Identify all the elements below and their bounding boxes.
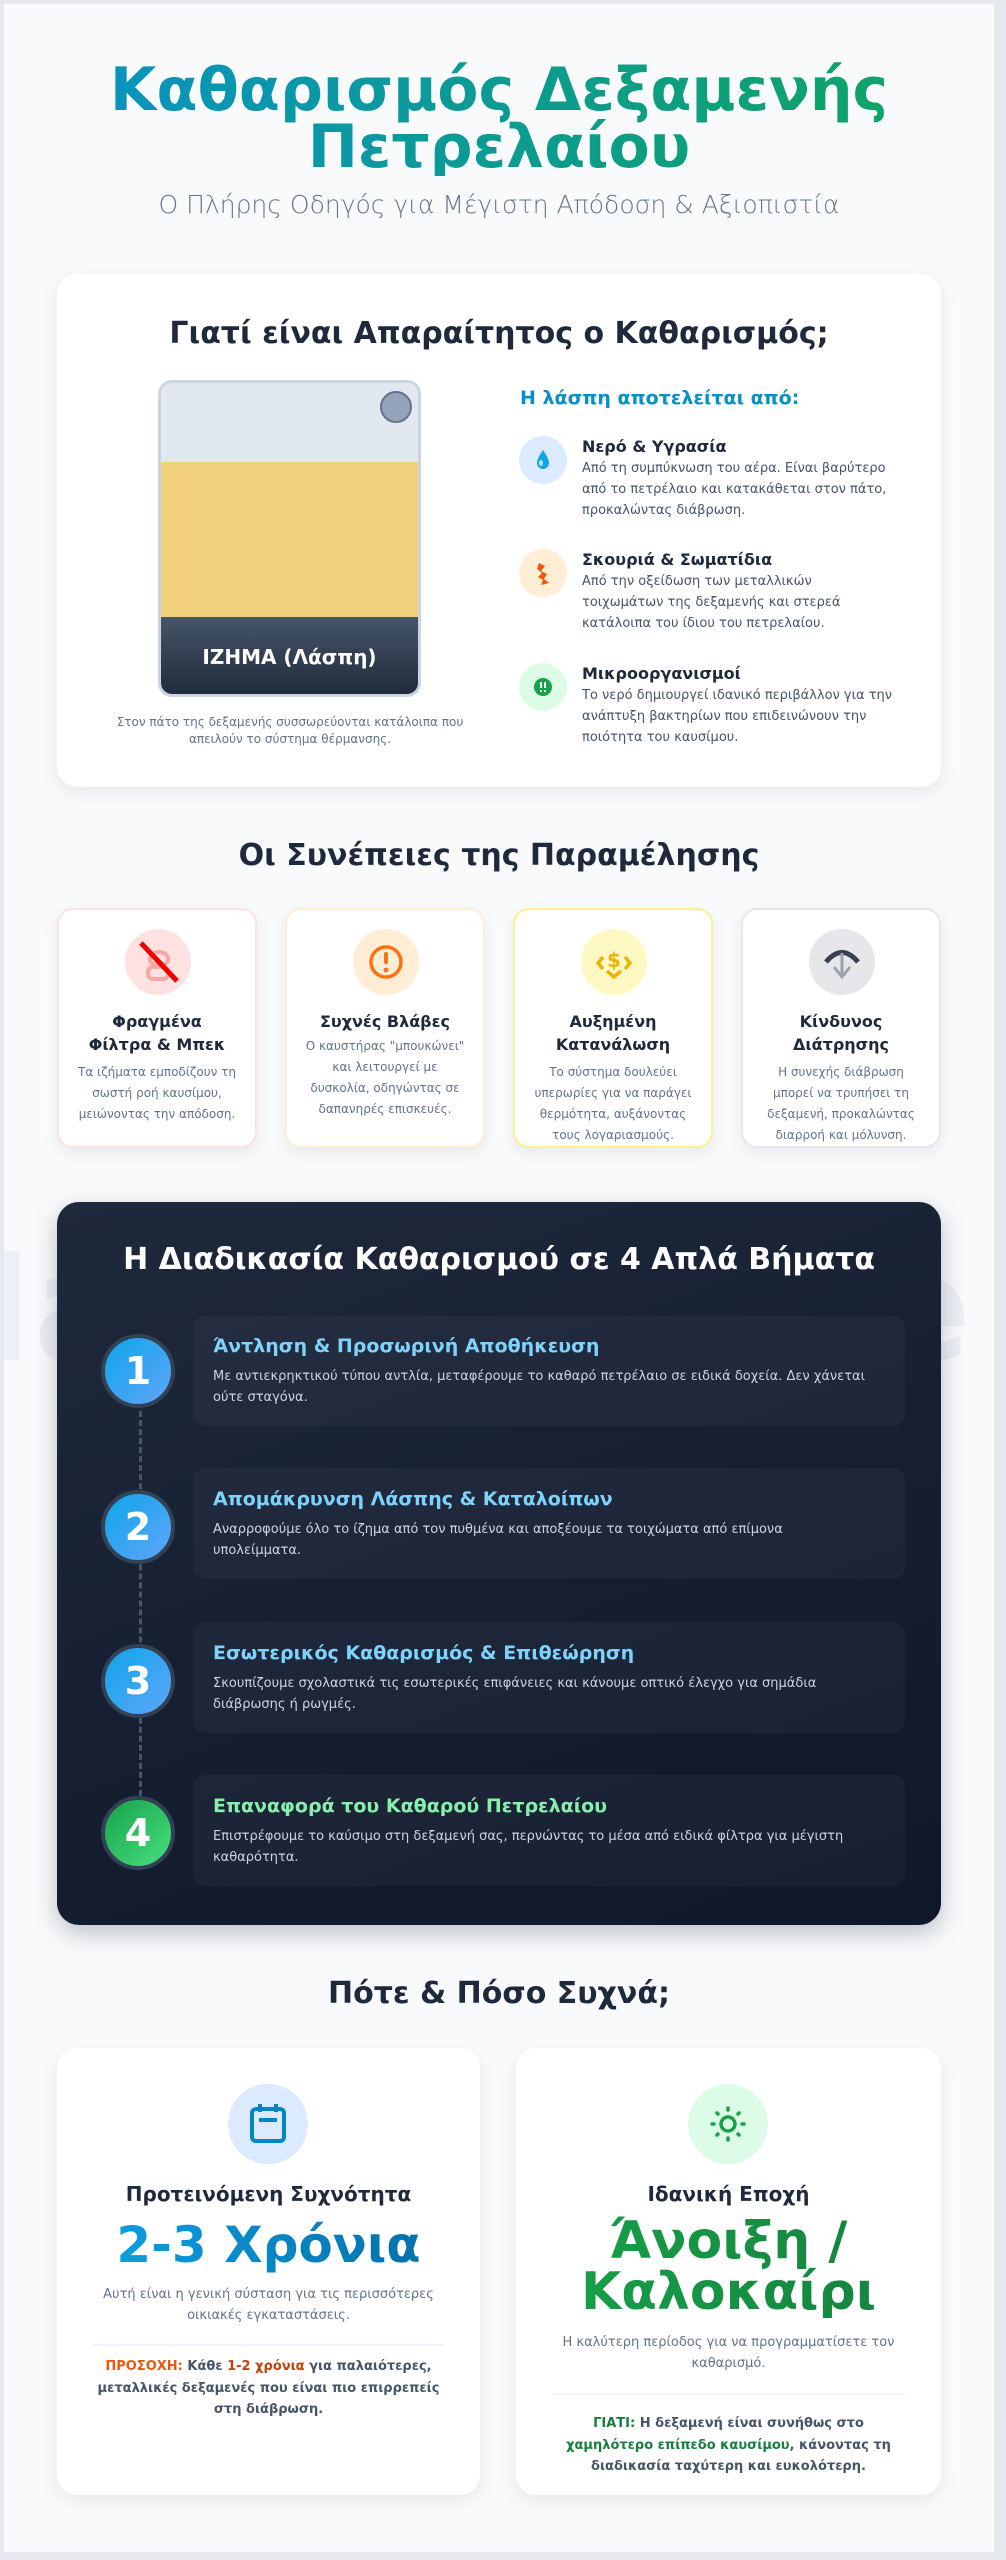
subtitle: Ο Πλήρης Οδηγός για Μέγιστη Απόδοση & Αξιοπιστία [158,190,840,219]
heading: when & how often: Πότε & Πόσο Συχνά; [328,1976,670,2011]
icon: calendar [228,2084,308,2164]
card: clogged filters [57,908,257,1148]
card: clogged filters: Τα ιζήματα εμποδίζουν τη σωστή ροή καυσίμου, μειώνοντας την απόδοση. [78,1065,236,1121]
icon: warning [353,929,419,995]
item: microorganisms: Μικροοργανισμοί [582,664,741,683]
card: season: Ιδανική Εποχή [647,2182,810,2206]
heading: Γιατί είναι Απαραίτητος ο Καθαρισμός; [169,316,829,351]
icon: money [581,929,647,995]
heading: Η Διαδικασία Καθαρισμού σε 4 Απλά Βήματα [123,1242,875,1277]
card: frequency: Προτεινόμενη Συχνότητα [126,2182,411,2206]
card: leak danger: Κίνδυνος [800,1012,882,1031]
card: clogged filters: Φραγμένα [112,1012,202,1031]
step 4: Επιστρέφουμε το καύσιμο στη δεξαμενή σας, περνώντας το μέσα από ειδικά φίλτρα για μέγιστη καθαρότητα. [213,1829,843,1865]
item: rust: Σκουριά & Σωματίδια [582,550,772,569]
step number 3: 3 [125,1659,151,1703]
panel: why cleaning [57,274,941,787]
step 2: Απομάκρυνση Λάσπης & Καταλοίπων [213,1488,613,1510]
item: water: Νερό & Υγρασία [582,437,726,456]
icon: leak [809,929,875,995]
big number: 2-3 Χρόνια [116,2216,421,2274]
icon: cap [380,391,412,423]
card: frequent failures: Συχνές Βλάβες [320,1012,450,1031]
big season: Καλοκαίρι [581,2262,876,2322]
title [4,62,994,176]
card: leak danger: Διάτρησης [793,1035,889,1054]
step number 1: 1 [125,1349,151,1393]
card: increased consumption: Το σύστημα δουλεύει υπερωρίες για να παράγει θερμότητα, αυξάνοντας τους λογαριασμούς. [535,1065,691,1142]
big number [57,2214,480,2276]
step 3: Σκουπίζουμε σχολαστικά τις εσωτερικές επιφάνειες και κάνουμε οπτικό έλεγχο για σημάδια διάβρωσης ή ρωγμές. [213,1676,816,1712]
subheading: Η λάσπη αποτελείται από: [520,387,799,409]
panel: consequence cards [57,908,941,1154]
card: clogged filters: Φίλτρα & Μπεκ [89,1035,225,1054]
icon: microbe [519,663,567,711]
tank illustration [158,380,421,697]
step number 4: 4 [125,1811,151,1855]
step 3: Εσωτερικός Καθαρισμός & Επιθεώρηση [213,1642,634,1664]
step number 2 [101,1490,175,1564]
title: Καθαρισμός Δεξαμενής [110,55,888,125]
card: frequent failures [285,908,485,1148]
card: frequent failures: Ο καυστήρας "μπουκώνει" και λειτουργεί με δυσκολία, οδηγώντας σε δαπανηρές επισκευές. [306,1039,464,1116]
icon: money: $ [607,948,621,972]
icon: water drop [519,436,567,484]
step number 1 [101,1334,175,1408]
panel: process steps [57,1202,941,1925]
card: increased consumption: Αυξημένη [570,1012,656,1031]
step number 3 [101,1644,175,1718]
step 3 [101,1642,816,1718]
step 2: Αναρροφούμε όλο το ίζημα από τον πυθμένα και αποξέουμε τα τοιχώματα από επίμονα υπολείμματα. [213,1522,783,1558]
big season [516,2216,941,2318]
sludge layer [161,617,418,697]
card: leak danger: Η συνεχής διάβρωση μπορεί να τρυπήσει τη δεξαμενή, προκαλώντας διαρροή και μόλυνση. [767,1065,915,1142]
item: water: Από τη συμπύκνωση του αέρα. Είναι βαρύτερο από το πετρέλαιο και κατακάθεται στον πάτο, προκαλώντας διάβρωση. [582,461,886,518]
tank caption: Στον πάτο της δεξαμενής συσσωρεύονται κατάλοιπα που απειλούν το σύστημα θέρμανσης. [117,715,463,746]
card: season [516,2048,941,2495]
icon: blocked filter [125,929,191,995]
card: leak danger [741,908,941,1148]
icon: rust [519,549,567,597]
title: Πετρελαίου [308,112,690,182]
step 4 [101,1795,843,1870]
timeline line [139,1402,142,1832]
warning note: ΠΡΟΣΟΧΗ: Κάθε 1-2 χρόνια για παλαιότερες, μεταλλικές δεξαμενές που είναι πιο επιρρεπείς στη διάβρωση. [98,2359,439,2417]
reason note: ΓΙΑΤΙ: Η δεξαμενή είναι συνήθως στο χαμηλότερο επίπεδο καυσίμου, κάνοντας τη διαδικασία ταχύτερη και ευκολότερη. [566,2416,891,2474]
yellow oil [161,462,418,617]
card: season: Η καλύτερη περίοδος για να προγραμματίσετε τον καθαρισμό. [563,2335,894,2371]
step 1: Με αντιεκρηκτικού τύπου αντλία, μεταφέρουμε το καθαρό πετρέλαιο σε ειδικά δοχεία. Δεν χάνεται ούτε σταγόνα. [213,1369,865,1405]
item: microorganisms: Το νερό δημιουργεί ιδανικό περιβάλλον για την ανάπτυξη βακτηρίων που επιδεινώνουν την ποιότητα του καυσίμου. [582,688,892,745]
step number 4 [101,1796,175,1870]
item: water [519,436,886,518]
step number 2: 2 [125,1505,151,1549]
step 4: Επαναφορά του Καθαρού Πετρελαίου [213,1795,607,1817]
item: microorganisms [519,663,892,745]
card: increased consumption: Κατανάλωση [556,1035,670,1054]
sludge layer: ΙΖΗΜΑ (Λάσπη) [202,645,377,669]
big season: Άνοιξη / [610,2211,847,2271]
step 1 [101,1334,865,1408]
item: rust [519,549,840,631]
card: increased consumption [513,908,713,1148]
icon: sun [688,2084,768,2164]
card: frequency: Αυτή είναι η γενική σύσταση για τις περισσότερες οικιακές εγκαταστάσεις. [103,2287,434,2323]
step 1: Άντληση & Προσωρινή Αποθήκευση [213,1335,599,1357]
heading: consequences: Οι Συνέπειες της Παραμέλησης [239,838,759,873]
step 2 [101,1488,783,1564]
item: rust: Από την οξείδωση των μεταλλικών τοιχωμάτων της δεξαμενής και στερεά κατάλοιπα του ίδιου του πετρελαίου. [582,574,840,631]
card: frequency [57,2048,480,2495]
